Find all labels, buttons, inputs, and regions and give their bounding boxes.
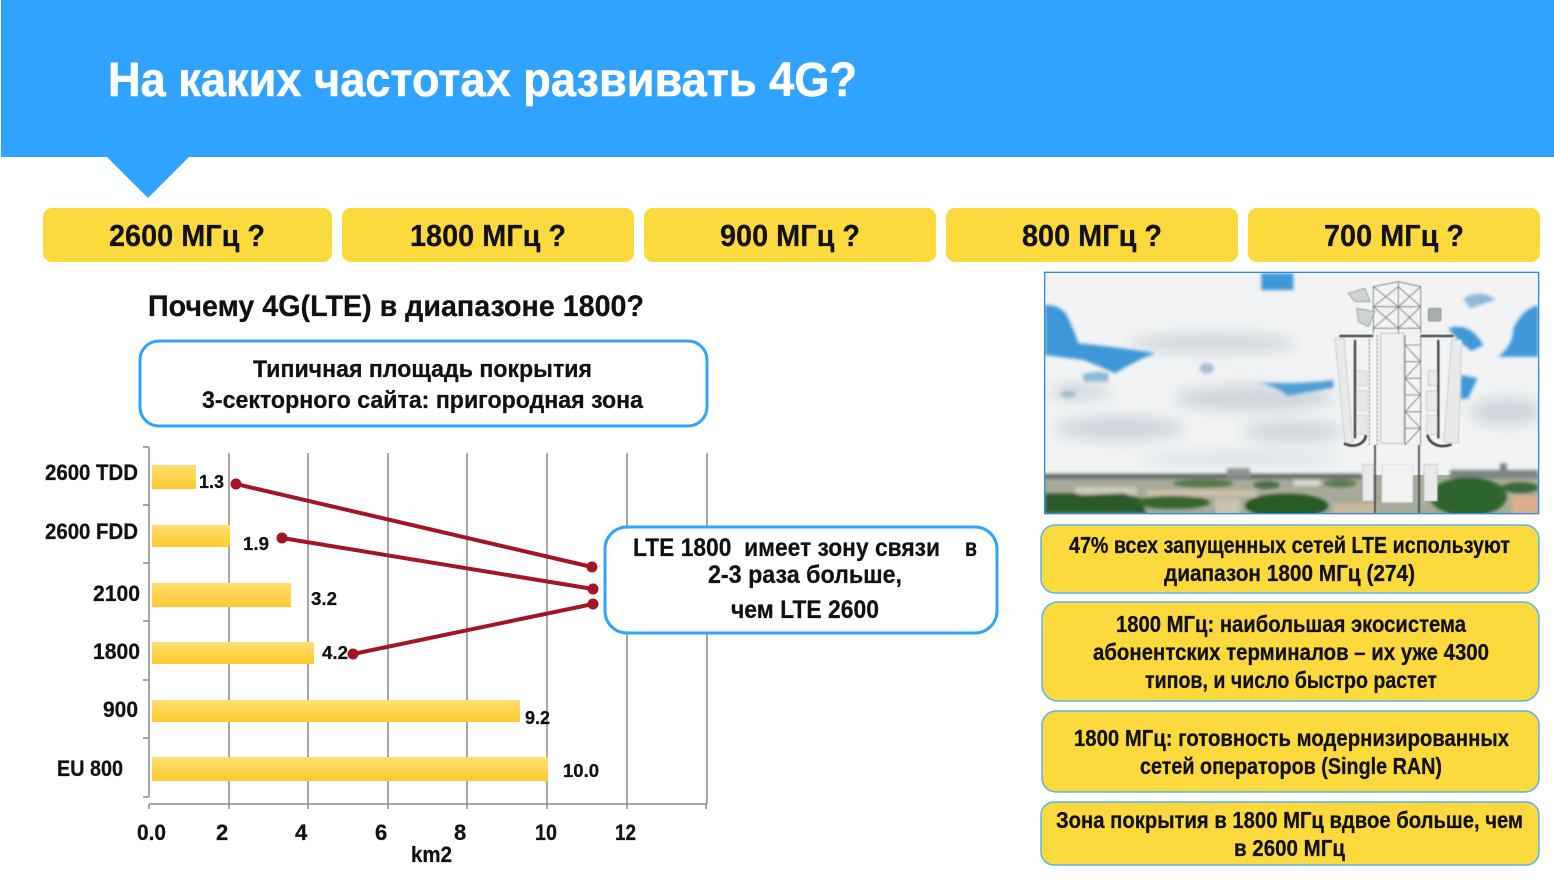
fact box: device ecosystem bbox=[1042, 602, 1539, 701]
x axis labels: 6 bbox=[375, 820, 387, 845]
fact box: Single RAN readiness bbox=[1042, 711, 1539, 792]
tab: 700: 700 МГц ? bbox=[1324, 218, 1464, 253]
x axis labels: 2 bbox=[216, 820, 228, 845]
horizon and greenery bbox=[1045, 463, 1540, 518]
LTE 1800 callout: в bbox=[965, 534, 977, 562]
tower bbox=[1335, 282, 1462, 513]
dishes bbox=[1348, 288, 1441, 327]
fact box: coverage comparison: в 2600 МГц bbox=[1234, 835, 1345, 861]
fact box: device ecosystem: абонентских терминалов – их уже 4300 bbox=[1093, 639, 1489, 665]
chart title callout bbox=[140, 341, 707, 426]
fact box: Single RAN readiness: сетей операторов (Single RAN) bbox=[1140, 753, 1442, 779]
chart title callout: 3-секторного сайта: пригородная зона bbox=[202, 387, 644, 414]
fact box: device ecosystem: 1800 МГц: наибольшая экосистема bbox=[1116, 611, 1466, 637]
fact box: Single RAN readiness: 1800 МГц: готовность модернизированных bbox=[1074, 725, 1509, 751]
chart title callout: Типичная площадь покрытия bbox=[253, 356, 592, 383]
value labels: 1.9 bbox=[243, 534, 269, 554]
fact box: coverage comparison bbox=[1041, 802, 1539, 865]
category labels: 1800 bbox=[93, 639, 140, 664]
value labels: 3.2 bbox=[311, 589, 337, 609]
tab: 1800 bbox=[342, 208, 634, 262]
LTE 1800 callout bbox=[605, 527, 997, 633]
bar chart: coverage area bbox=[45, 447, 707, 867]
x axis labels bbox=[137, 820, 636, 867]
sky and clouds bbox=[1045, 273, 1538, 475]
category labels bbox=[45, 460, 140, 781]
category labels: EU 800 bbox=[57, 756, 123, 781]
tab: 1800: 1800 МГц ? bbox=[410, 218, 566, 253]
x axis labels: 4 bbox=[295, 820, 308, 845]
title: На каких частотах развивать 4G? bbox=[108, 54, 857, 107]
tab: 800 bbox=[946, 208, 1238, 262]
x axis labels: 10 bbox=[535, 820, 557, 845]
tab: 2600: 2600 МГц ? bbox=[109, 218, 265, 253]
LTE 1800 callout: 2-3 раза больше, bbox=[708, 561, 902, 589]
value labels: 1.3 bbox=[199, 472, 224, 492]
LTE 1800 callout: LTE 1800 имеет зону связи bbox=[633, 534, 940, 562]
x axis labels: km2 bbox=[411, 842, 452, 867]
category labels: 900 bbox=[103, 697, 138, 722]
frequency tabs bbox=[43, 208, 1540, 262]
fact box: network share: диапазон 1800 МГц (274) bbox=[1164, 560, 1415, 586]
lattice bbox=[1369, 282, 1421, 445]
tab: 900: 900 МГц ? bbox=[720, 218, 860, 253]
bars bbox=[152, 465, 548, 781]
section heading: Почему 4G(LTE) в диапазоне 1800? bbox=[148, 290, 644, 323]
category labels: 2600 TDD bbox=[45, 460, 138, 485]
x axis labels: 12 bbox=[615, 820, 636, 845]
value labels: 4.2 bbox=[322, 643, 348, 663]
fact box: device ecosystem: типов, и число быстро растет bbox=[1145, 667, 1437, 693]
photo: antenna tower against cloudy sky bbox=[1045, 272, 1543, 518]
header band bbox=[1, 0, 1554, 198]
fact box: network share bbox=[1041, 525, 1539, 593]
value labels bbox=[199, 472, 599, 781]
antenna panels bbox=[1335, 333, 1462, 502]
main poles bbox=[1375, 445, 1419, 513]
x axis labels: 8 bbox=[454, 820, 466, 845]
value labels: 9.2 bbox=[525, 708, 550, 728]
tab: 900 bbox=[644, 208, 936, 262]
category labels: 2600 FDD bbox=[45, 519, 138, 544]
support arms bbox=[1339, 336, 1453, 446]
x axis labels: 0.0 bbox=[137, 820, 166, 845]
tab: 700 bbox=[1248, 208, 1540, 262]
photo frame bbox=[1045, 272, 1539, 514]
tab: 2600 bbox=[43, 208, 332, 262]
LTE 1800 callout: чем LTE 2600 bbox=[731, 596, 879, 624]
category labels: 2100 bbox=[93, 581, 140, 606]
value labels: 10.0 bbox=[563, 761, 599, 781]
connector lines bbox=[230, 478, 598, 660]
tab: 800: 800 МГц ? bbox=[1022, 218, 1162, 253]
